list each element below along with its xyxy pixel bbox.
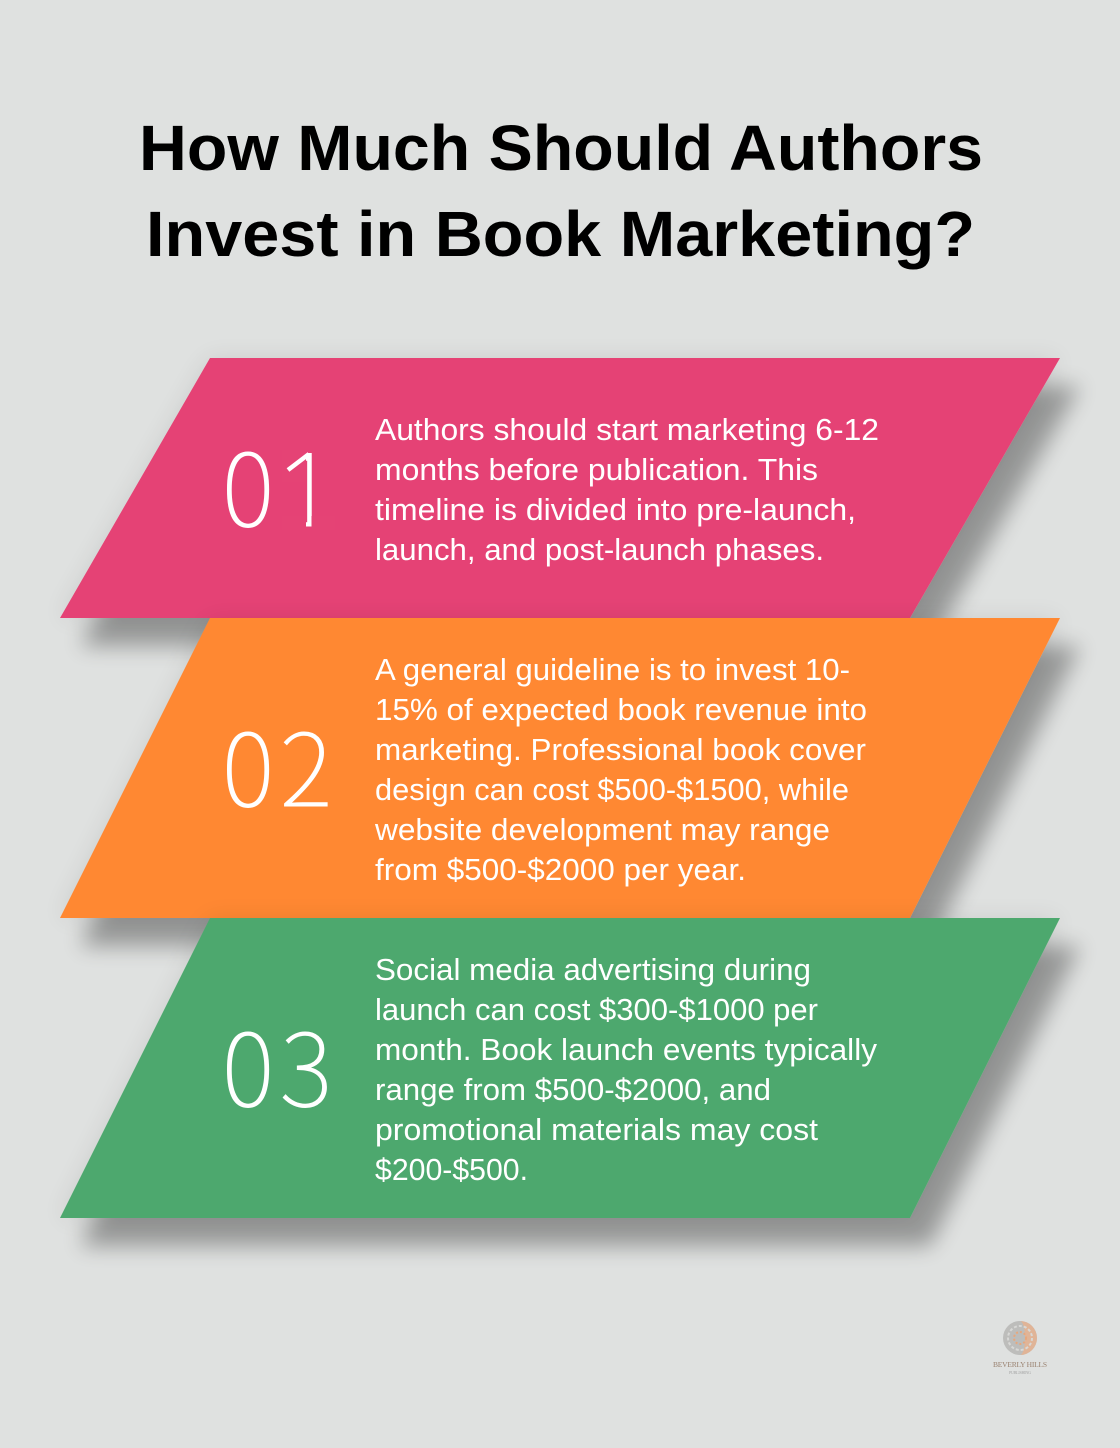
- panel: step 02: [60, 618, 1060, 918]
- text: step 03 description: launch can cost $300-$1000 per: [375, 992, 818, 1027]
- pink parallelogram: [60, 358, 1060, 618]
- number 02: 02: [222, 690, 332, 835]
- icon: logo globe: [1003, 1321, 1037, 1355]
- logo: Beverly Hills Publishing: [993, 1321, 1047, 1375]
- text: step 02 description: from $500-$2000 per year.: [375, 852, 746, 887]
- title: Invest in Book Marketing?: [146, 198, 975, 270]
- text: step 02 description: website development may range: [374, 812, 830, 847]
- text: step 03 description: range from $500-$2000, and: [375, 1072, 771, 1107]
- logo tagline: PUBLISHING: [1009, 1370, 1031, 1375]
- number 01: 01: [222, 410, 334, 555]
- logo wordmark: BEVERLY HILLS: [993, 1360, 1047, 1369]
- text: step 02 description: marketing. Professional book cover: [375, 732, 866, 767]
- text: step 01 description: [375, 412, 879, 567]
- title: How Much Should Authors: [139, 112, 983, 184]
- text: step 01 description: months before publication. This: [375, 452, 818, 487]
- panel: step 01: [60, 358, 1060, 618]
- text: step 01 description: timeline is divided into pre-launch,: [375, 492, 856, 527]
- text: step 02 description: design can cost $500-$1500, while: [375, 772, 849, 807]
- title: [139, 112, 983, 270]
- text: step 02 description: 15% of expected book revenue into: [375, 692, 867, 727]
- text: step 02 description: [374, 652, 867, 887]
- orange parallelogram: [60, 618, 1060, 918]
- number 03: 03: [222, 990, 332, 1135]
- text: step 03 description: Social media advertising during: [375, 952, 811, 987]
- text: step 02 description: A general guideline is to invest 10-: [375, 652, 850, 687]
- panel: step 03: [60, 918, 1060, 1218]
- text: step 03 description: promotional materials may cost: [375, 1112, 818, 1147]
- text: step 03 description: month. Book launch events typically: [375, 1032, 878, 1067]
- text: step 03 description: [375, 952, 878, 1187]
- text: step 03 description: $200-$500.: [375, 1152, 528, 1187]
- text: step 01 description: launch, and post-launch phases.: [375, 532, 824, 567]
- text: step 01 description: Authors should start marketing 6-12: [375, 412, 879, 447]
- green parallelogram: [60, 918, 1060, 1218]
